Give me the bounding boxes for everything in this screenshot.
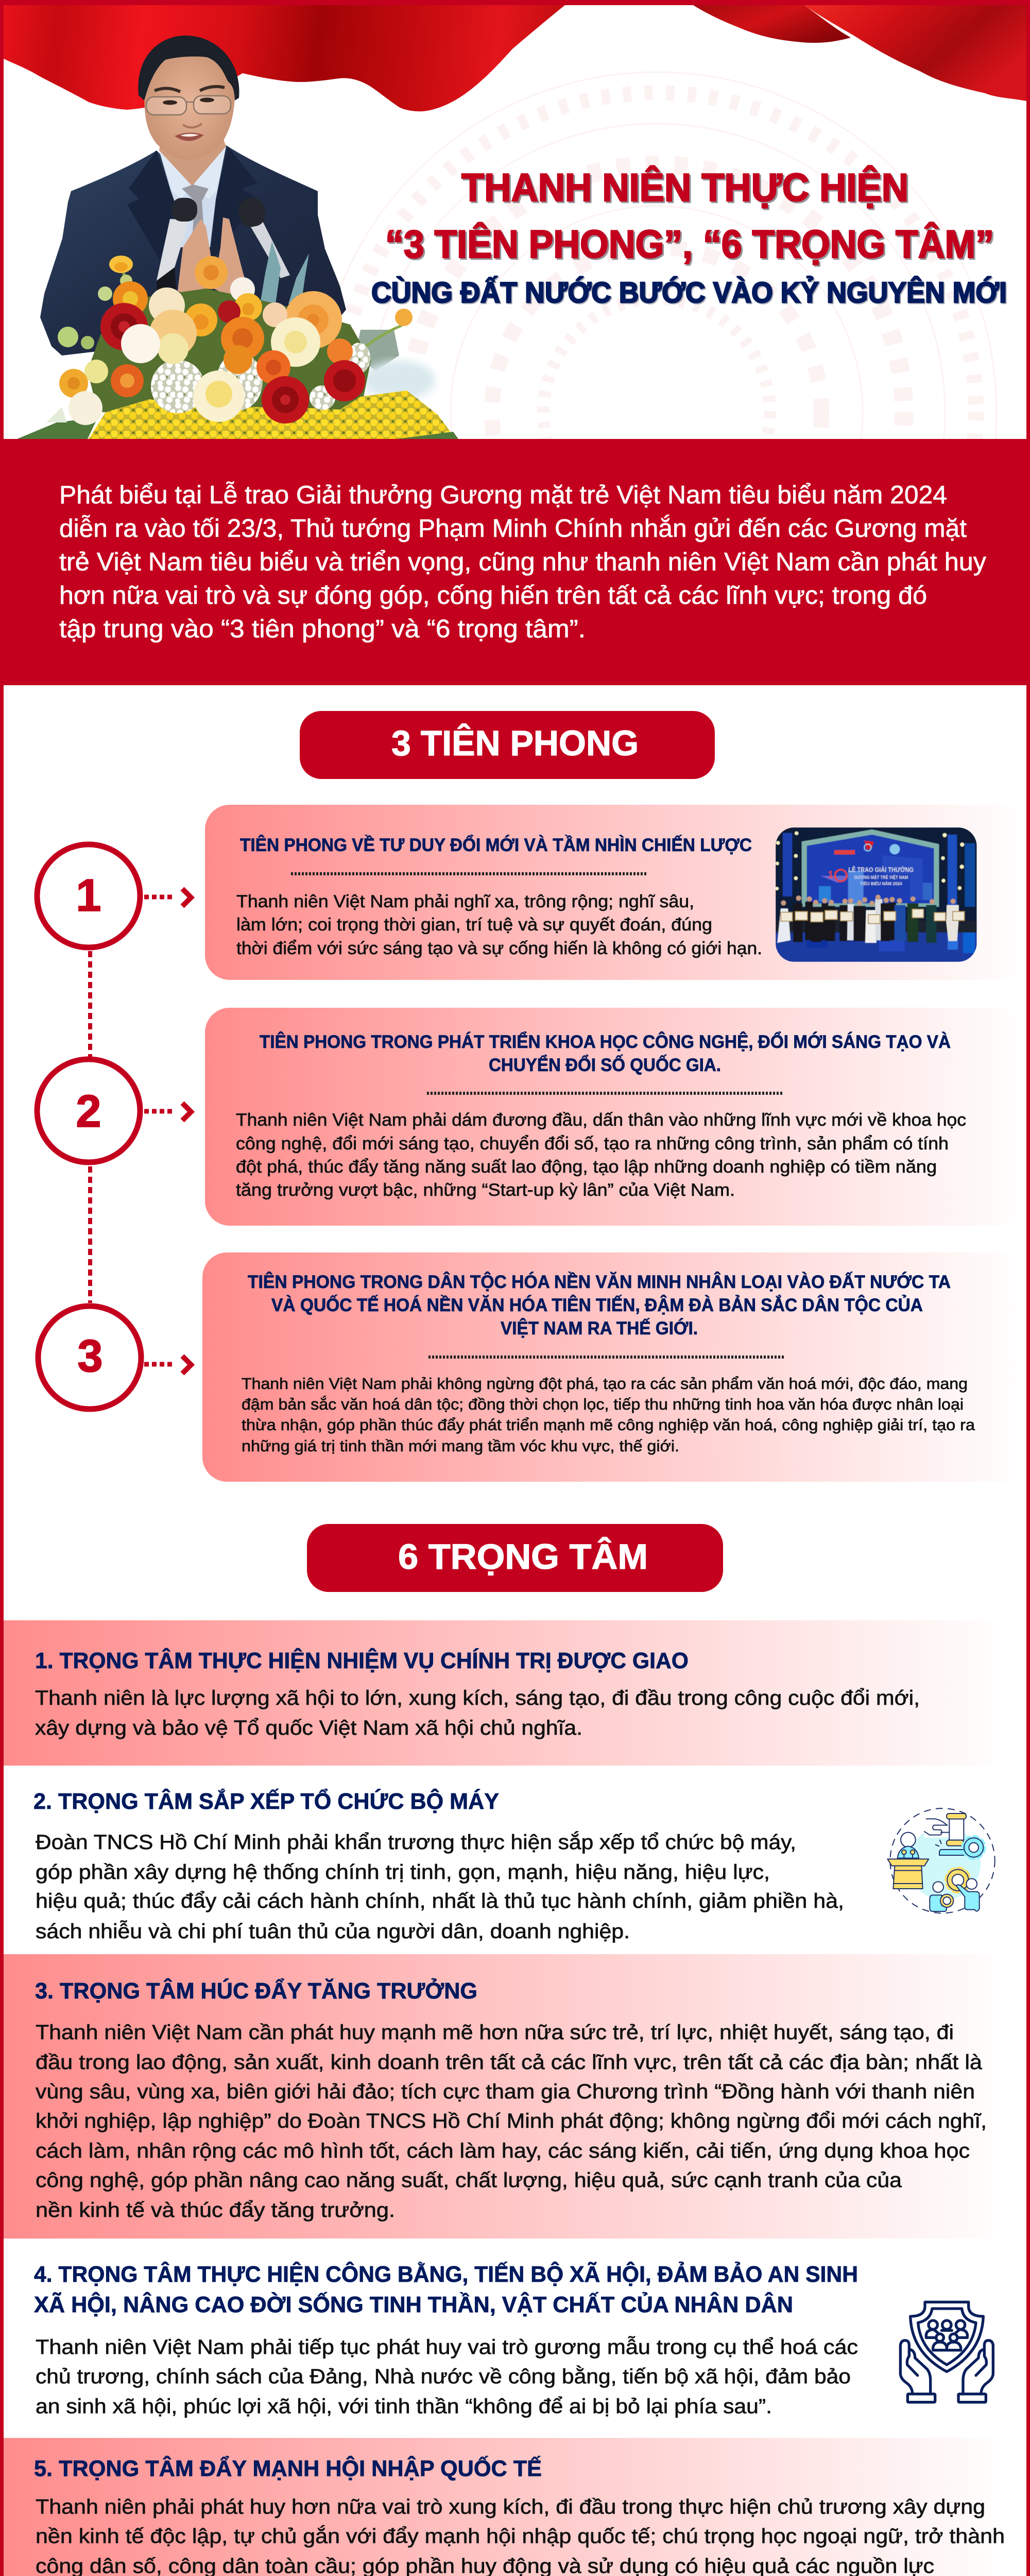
card 3 body: đậm bản sắc văn hoá dân tộc; đồng thời chọn lọc, tiếp thu những tinh hoa văn hóa được nhân loại	[242, 1395, 964, 1413]
card 3 title: VÀ QUỐC TẾ HOÁ NỀN VĂN HÓA TIÊN TIẾN, ĐẬM ĐÀ BẢN SẮC DÂN TỘC CỦA	[271, 1295, 923, 1315]
intro text: tập trung vào “3 tiên phong” và “6 trọng tâm”.	[59, 615, 586, 643]
icon: organisation restructuring	[887, 1808, 995, 1913]
card 2 title	[260, 1031, 951, 1075]
lapels	[127, 146, 258, 263]
section 3	[4, 1954, 1013, 2239]
section 1 body	[35, 1687, 920, 1739]
card 1 body: làm lớn; coi trọng thời gian, trí tuệ và sự quyết đoán, đúng	[236, 915, 712, 935]
card 2 body: Thanh niên Việt Nam phải dám đương đầu, dấn thân vào những lĩnh vực mới về khoa học	[236, 1110, 966, 1130]
section 5 body: nền kinh tế độc lập, tự chủ gắn với đẩy mạnh hội nhập quốc tế; chú trọng học ngoại ngữ, trở thành	[36, 2524, 1005, 2548]
photo: award ceremony stage	[775, 827, 977, 962]
card 2 body: công nghệ, đổi mới sáng tạo, chuyển đổi số, tạo ra những công trình, sản phẩm có tính	[236, 1134, 949, 1154]
photo: award ceremony stage: LỄ TRAO GIẢI THƯỞNG	[848, 866, 914, 874]
section 3 body: nền kinh tế và thúc đẩy tăng trưởng.	[36, 2199, 395, 2222]
section 2 body: sách nhiễu và chi phí tuân thủ của người dân, doanh nghiệp.	[36, 1920, 630, 1943]
portrait of speaker	[40, 36, 346, 355]
arrow 1	[144, 889, 191, 906]
leaves at base	[17, 417, 458, 439]
blue and green foliage sprigs	[260, 241, 309, 304]
section 5	[4, 2438, 1013, 2576]
section 3 body: cách làm, nhân rộng các mô hình tốt, cách làm hay, các sáng kiến, cải tiến, ứng dụng khoa học	[36, 2140, 970, 2162]
suit	[40, 145, 346, 355]
section 1	[4, 1620, 1013, 1766]
photo: award ceremony stage: GƯƠNG MẶT TRẺ VIỆT NAM	[854, 874, 908, 880]
microphones	[157, 195, 290, 309]
glasses	[146, 96, 231, 115]
card 2	[205, 1008, 1026, 1226]
section 3 title: 3. TRỌNG TÂM HÚC ĐẨY TĂNG TRƯỞNG	[35, 1977, 477, 2004]
heading: 3 tiên phong: 3 TIÊN PHONG	[391, 723, 639, 763]
card 1 body: thời điểm với sức sáng tạo và sự cống hiến là không có giới hạn.	[236, 939, 762, 958]
blooms	[58, 256, 413, 425]
curtain: left drape	[4, 5, 565, 111]
photo: award ceremony stage: TIÊU BIỂU NĂM 2024	[860, 880, 902, 886]
card 1 body: Thanh niên Việt Nam phải nghĩ xa, trông rộng; nghĩ sâu,	[236, 892, 694, 911]
stage lights	[775, 832, 964, 890]
arrow 3	[144, 1356, 191, 1374]
section 5 body: Thanh niên phải phát huy hơn nữa vai trò xung kích, đi đầu trong thực hiện chủ trương xây dựng	[36, 2496, 985, 2518]
section 4 body	[36, 2335, 858, 2418]
tie	[182, 184, 209, 247]
section 1 body: Thanh niên là lực lượng xã hội to lớn, xung kích, sáng tạo, đi đầu trong công cuộc đổi mới,	[35, 1687, 920, 1709]
icon: hands protecting people shield	[900, 2302, 993, 2402]
bouquet greenery base	[88, 289, 371, 412]
card 1 title: TIÊN PHONG VỀ TƯ DUY ĐỔI MỚI VÀ TẦM NHÌN CHIẾN LƯỢC	[240, 835, 752, 855]
title: CÙNG ĐẤT NƯỚC BƯỚC VÀO KỶ NGUYÊN MỚI	[371, 276, 1007, 309]
section 3 body: khởi nghiệp, lập nghiệp” do Đoàn TNCS Hồ Chí Minh phát động; không ngừng đổi mới cách nghĩ,	[36, 2110, 987, 2132]
card 2 title: CHUYỂN ĐỔI SỐ QUỐC GIA.	[489, 1055, 721, 1075]
section 4 body: chủ trương, chính sách của Đảng, Nhà nước về công bằng, tiến bộ xã hội, đảm bảo	[36, 2365, 851, 2388]
section 3 body	[36, 2021, 987, 2222]
section 5 title: 5. TRỌNG TÂM ĐẨY MẠNH HỘI NHẬP QUỐC TẾ	[34, 2455, 542, 2481]
section 4 body: an sinh xã hội, phúc lợi xã hội, với tinh thần “không để ai bị bỏ lại phía sau”.	[36, 2395, 772, 2418]
curtain: right outer drape	[804, 5, 1026, 101]
card 1 body	[236, 892, 762, 958]
step 2 circle	[37, 1059, 140, 1162]
step 1 circle: 1	[76, 870, 101, 921]
card 3 body: thừa nhận, góp phần thúc đẩy phát triển mạnh mẽ công nghiệp văn hoá, công nghiệp giải trí, tạo ra	[242, 1416, 975, 1434]
card 3 body: những giá trị tinh thần mới mang tầm vóc khu vực, thế giới.	[242, 1437, 679, 1455]
intro text: hơn nữa vai trò và sự đóng góp, cống hiến trên tất cả các lĩnh vực; trong đó	[59, 582, 927, 609]
section 2	[33, 1788, 995, 1943]
card 3 title: TIÊN PHONG TRONG DÂN TỘC HÓA NỀN VĂN MINH NHÂN LOẠI VÀO ĐẤT NƯỚC TA	[248, 1272, 951, 1292]
timeline connector: dashed lines	[88, 951, 92, 1303]
intro text: trẻ Việt Nam tiêu biểu và triển vọng, cũng như thanh niên Việt Nam cần phát huy	[59, 548, 987, 576]
card 3	[202, 1252, 1026, 1482]
curtain: right inner drape	[693, 5, 851, 43]
section 5 body	[36, 2496, 1005, 2576]
intro panel	[0, 439, 1030, 685]
card 1	[205, 805, 1026, 980]
section 3 body: vùng sâu, vùng xa, biên giới hải đảo; tích cực tham gia Chương trình “Đồng hành với thanh niên	[36, 2080, 975, 2103]
photo: award ceremony stage: 1	[828, 870, 833, 880]
header: hero with curtains, portrait and title	[4, 5, 1026, 439]
card 3 body: Thanh niên Việt Nam phải không ngừng đột phá, tạo ra các sản phẩm văn hoá mới, độc đáo, mang	[242, 1375, 968, 1393]
section 3 body: công nghệ, góp phần nâng cao năng suất, chất lượng, hiệu quả, sức cạnh tranh của của	[36, 2169, 902, 2192]
intro text: diễn ra vào tối 23/3, Thủ tướng Phạm Minh Chính nhắn gửi đến các Gương mặt	[59, 515, 967, 543]
section 4 title: XÃ HỘI, NÂNG CAO ĐỜI SỐNG TINH THẦN, VẬT CHẤT CỦA NHÂN DÂN	[34, 2291, 793, 2317]
certificates	[781, 909, 965, 924]
card 2 body: đột phá, thúc đẩy tăng năng suất lao động, tạo lập những doanh nghiệp có tiềm năng	[236, 1157, 937, 1177]
heads	[781, 895, 956, 906]
section 2 body	[36, 1831, 844, 1943]
hands	[178, 217, 248, 304]
eyes, nose, mouth	[163, 100, 177, 105]
step 3 circle	[38, 1306, 141, 1409]
baby's breath clusters	[151, 343, 370, 413]
face	[144, 45, 235, 160]
title	[371, 165, 1007, 309]
card 3 title	[248, 1272, 951, 1338]
section 1 title: 1. TRỌNG TÂM THỰC HIỆN NHIỆM VỤ CHÍNH TRỊ ĐƯỢC GIAO	[35, 1648, 689, 1673]
hair	[138, 36, 239, 100]
section 2 body: hiệu quả; thúc đẩy cải cách hành chính, nhất là thủ tục hành chính, giảm phiền hà,	[36, 1890, 844, 1912]
card 3 title: VIỆT NAM RA THẾ GIỚI.	[501, 1318, 698, 1338]
shirt collar	[159, 146, 226, 199]
step 1 circle	[37, 844, 140, 947]
section 1 body: xây dựng và bảo vệ Tổ quốc Việt Nam xã hội chủ nghĩa.	[35, 1717, 582, 1739]
intro text	[59, 481, 987, 643]
section 3 body: đầu trong lao động, sản xuất, kinh doanh trên tất cả các lĩnh vực, trên tất cả các địa bàn; nhất là	[36, 2051, 983, 2074]
card 2 body: tăng trưởng vượt bậc, những “Start-up kỳ lân” của Việt Nam.	[236, 1180, 735, 1200]
section 3 body: Thanh niên Việt Nam cần phát huy mạnh mẽ hơn nữa sức trẻ, trí lực, nhiệt huyết, sáng tạo, đi	[36, 2021, 954, 2044]
shirt	[159, 146, 226, 247]
card 2 body	[236, 1110, 966, 1200]
arrow 2	[144, 1103, 191, 1121]
yellow mimosa	[89, 391, 456, 439]
step 3 circle: 3	[78, 1330, 102, 1381]
heading: 6 trọng tâm	[307, 1524, 723, 1592]
eyebrows	[154, 87, 225, 92]
section 2 body: góp phần xây dựng hệ thống chính trị tinh, gọn, mạnh, hiệu năng, hiệu lực,	[36, 1861, 770, 1884]
heading: 6 trọng tâm: 6 TRỌNG TÂM	[398, 1537, 648, 1577]
background emblem watermark	[340, 71, 997, 439]
card 3 body	[242, 1375, 975, 1455]
section 4 title: 4. TRỌNG TÂM THỰC HIỆN CÔNG BẰNG, TIẾN BỘ XÃ HỘI, ĐẢM BẢO AN SINH	[34, 2261, 858, 2287]
heading: 3 tiên phong	[300, 711, 715, 779]
neck	[159, 137, 226, 186]
title: “3 TIÊN PHONG”, “6 TRỌNG TÂM”	[385, 222, 994, 266]
award recipients	[777, 899, 959, 943]
flower arrangement	[17, 241, 458, 439]
intro text: Phát biểu tại Lễ trao Giải thưởng Gương mặt trẻ Việt Nam tiêu biểu năm 2024	[59, 481, 947, 509]
section 2 body: Đoàn TNCS Hồ Chí Minh phải khẩn trương thực hiện sắp xếp tổ chức bộ máy,	[36, 1831, 796, 1854]
section 2 title: 2. TRỌNG TÂM SẮP XẾP TỔ CHỨC BỘ MÁY	[33, 1788, 499, 1814]
section 4	[34, 2261, 993, 2418]
step 2 circle: 2	[76, 1086, 101, 1137]
section 4 body: Thanh niên Việt Nam phải tiếp tục phát huy vai trò gương mẫu trong cụ thể hoá các	[36, 2335, 858, 2359]
section 4 title	[34, 2261, 858, 2317]
card 2 title: TIÊN PHONG TRONG PHÁT TRIỂN KHOA HỌC CÔNG NGHỆ, ĐỔI MỚI SÁNG TẠO VÀ	[260, 1031, 951, 1052]
title: THANH NIÊN THỰC HIỆN	[461, 165, 908, 210]
